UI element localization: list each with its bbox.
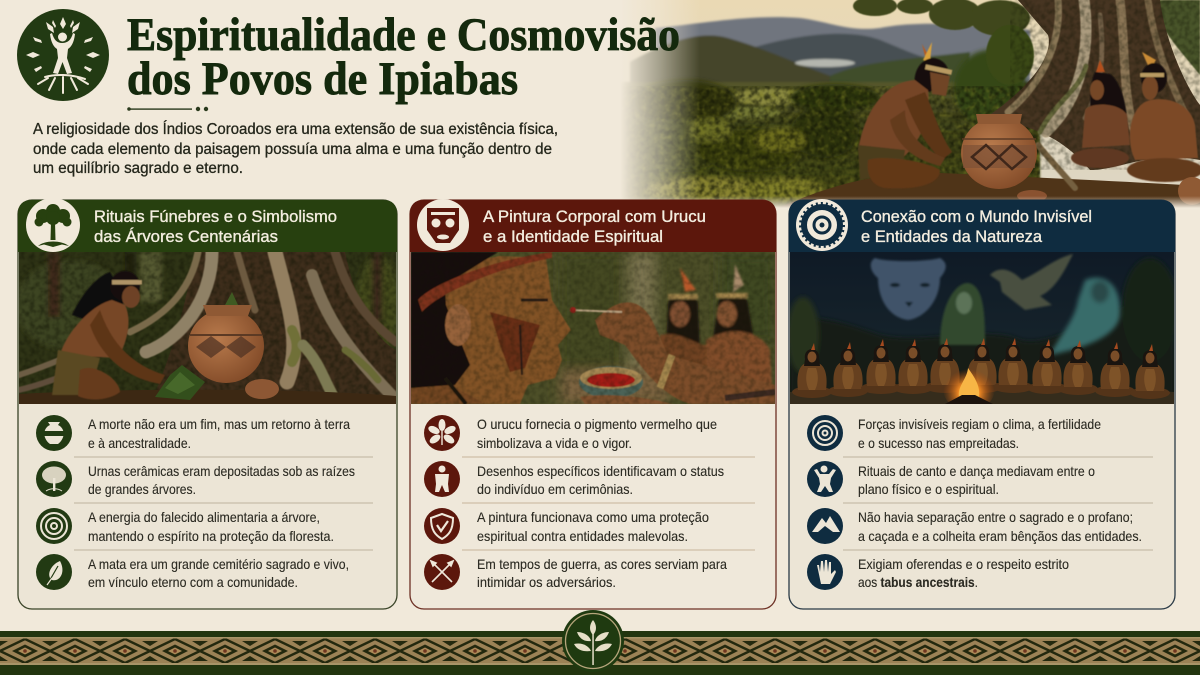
list: rituais: Urnas cerâmicas eram depositadas sob as raízes [88,463,355,479]
seated woman [1071,60,1130,168]
image: face painting with urucu [411,252,775,404]
list: pintura: do indivíduo em cerimônias. [477,481,633,497]
image: spirits over the campfire [787,252,1178,412]
list: mundo invisível: a caçada e a colheita eram bênçãos das entidades. [858,528,1142,544]
list: pintura: O urucu fornecia o pigmento vermelho que [477,416,717,432]
icon: crossed spears [424,554,460,590]
panel header blue: e Entidades da Natureza [861,227,1043,246]
foliage [853,0,1200,85]
panel header red: e a Identidade Espiritual [483,227,663,246]
panel header blue [789,199,1175,252]
panel: rituais fúnebres [15,198,400,609]
footer emblem [562,610,624,672]
icon: shield [424,508,460,544]
intro text: onde cada elemento da paisagem possuía uma alma e uma função dentro de [33,141,552,158]
urn [961,114,1037,189]
background figures [660,264,773,384]
seated man [1127,52,1200,182]
panel header green [18,198,397,252]
title: dos Povos de Ipiabas [127,53,518,105]
list: pintura: intimidar os adversários. [477,574,616,590]
list: rituais: mantendo o espírito na proteção da floresta. [88,528,334,544]
panel header red: A Pintura Corporal com Urucu [483,207,706,226]
list: mundo invisível: Rituais de canto e dança mediavam entre o [858,463,1095,479]
list: rituais: e à ancestralidade. [88,435,191,451]
icon: urn [36,415,72,451]
forest spirit [940,283,985,345]
title [127,9,680,105]
list: rituais: A energia do falecido alimentaria a árvore, [88,509,320,525]
list: mundo invisível: Não havia separação entre o sagrado e o profano; [858,509,1133,525]
list: mundo invisível: aos tabus ancestrais. [858,574,978,590]
small pot [1178,177,1200,205]
kneeling man [858,42,952,188]
man with paint [411,252,571,404]
intro text: um equilíbrio sagrado e eterno. [33,160,243,177]
list: mundo invisível: Forças invisíveis regiam o clima, a fertilidade [858,416,1101,432]
panel header blue: Conexão com o Mundo Invisível [861,207,1092,226]
list: mundo invisível: Exigiam oferendas e o respeito estrito [858,556,1069,572]
icon: hand [807,554,843,590]
image: urn under the roots [15,252,400,404]
list: rituais [36,415,373,590]
panel: pintura corporal [410,199,776,609]
jaguar spirit [871,258,946,320]
icon: urucu flower [424,415,460,451]
tree trunk [985,0,1200,170]
icon: dancer [807,461,843,497]
icon: mountains [807,508,843,544]
list: pintura: Desenhos específicos identificavam o status [477,463,724,479]
list: mundo invisível: e o sucesso nas empreitadas. [858,435,1019,451]
eagle spirit [990,254,1073,310]
hero image: landscape with figures and urn [600,0,1200,208]
list: rituais: em vínculo eterno com a comunidade. [88,574,298,590]
intro text [33,121,558,177]
list: mundo invisível: plano físico e o espiritual. [858,481,999,497]
water spirit [1050,278,1120,355]
icon: concentric rings [36,508,72,544]
panel: mundo invisível [787,199,1178,609]
list: rituais: A morte não era um fim, mas um retorno à terra [88,416,350,432]
panel header green: Rituais Fúnebres e o Simbolismo [94,207,337,226]
list: pintura: A pintura funcionava como uma proteção [477,509,709,525]
list: rituais: A mata era um grande cemitério sagrado e vivo, [88,556,349,572]
intro text: A religiosidade dos Índios Coroados era uma extensão de sua existência física, [33,121,558,138]
logo [17,9,109,101]
list: rituais: de grandes árvores. [88,481,196,497]
list: pintura: simbolizava a vida e o vigor. [477,435,632,451]
list: pintura [424,415,755,590]
icon: tree [36,461,72,497]
footer band [0,631,1200,675]
icon: person [424,461,460,497]
icon: spiral [807,415,843,451]
title: Espiritualidade e Cosmovisão [127,9,680,61]
title divider [127,107,208,111]
list: mundo invisível [807,415,1153,590]
icon: leaf [36,554,72,590]
hand, arm and brush [570,302,775,404]
panel header red [410,199,776,252]
kneeling man [52,271,165,399]
list: pintura: espiritual contra entidades malevolas. [477,528,688,544]
list: pintura: Em tempos de guerra, as cores serviam para [477,556,727,572]
panel header green: das Árvores Centenárias [94,227,278,246]
